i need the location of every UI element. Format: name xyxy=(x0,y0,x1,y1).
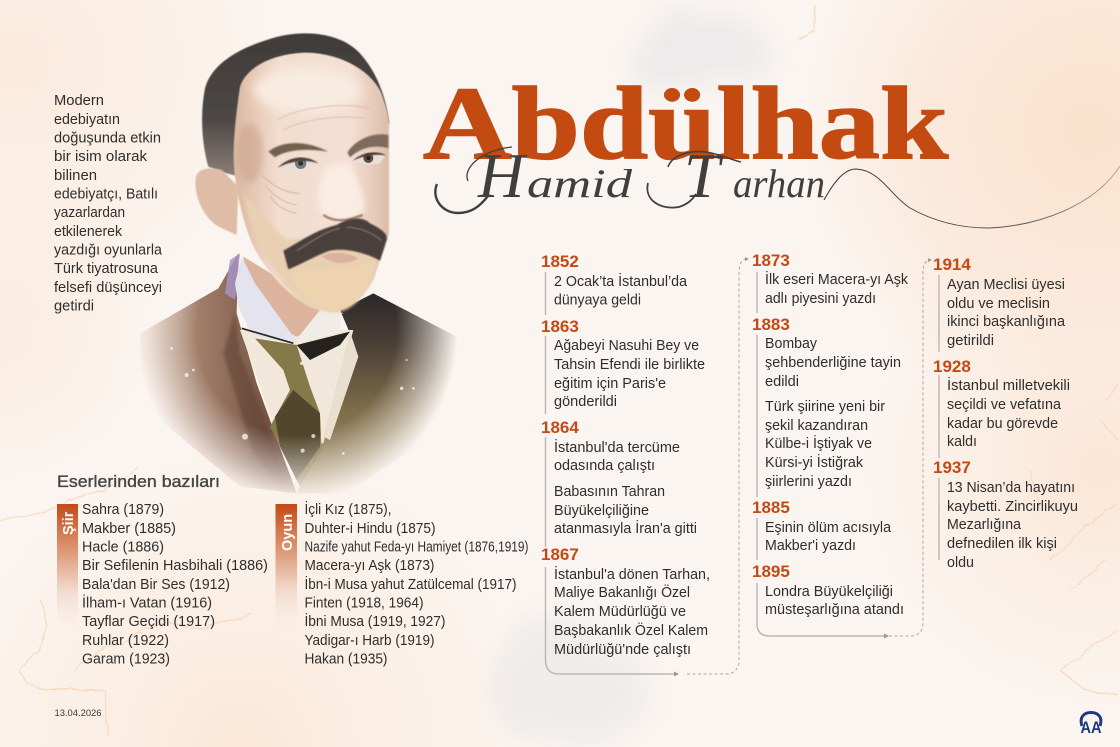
year 1883: Bombay xyxy=(765,336,818,352)
year 1873: İlk eseri Macera-yı Aşk xyxy=(765,270,909,288)
subtitle: Hamid Tarhan xyxy=(435,140,825,213)
year 1885 xyxy=(752,498,892,560)
intro paragraph xyxy=(54,93,163,314)
portrait of Abdülhak Hamid Tarhan xyxy=(140,33,457,493)
year 1883: şehbenderliğine tayin xyxy=(765,355,901,371)
year 1873 xyxy=(752,251,909,313)
year 1864: odasında çalıştı xyxy=(554,458,655,474)
subtitle: Hamid Tarhan: amid xyxy=(527,161,633,206)
year 1852: dünyaya geldi xyxy=(554,292,641,308)
intro paragraph: Türk tiyatrosuna xyxy=(54,261,159,277)
plays titles xyxy=(304,500,528,668)
icon: AA agency logo xyxy=(1080,712,1102,737)
year 1928: kadar bu görevde xyxy=(947,416,1058,432)
plays category bar: Oyun xyxy=(280,514,296,551)
year 1914: ikinci başkanlığına xyxy=(947,314,1066,330)
year 1928: seçildi ve vefatına xyxy=(947,397,1062,413)
year 1895: müsteşarlığına atandı xyxy=(765,602,904,618)
intro paragraph: etkilenerek xyxy=(54,224,123,240)
poetry titles xyxy=(82,502,268,668)
year 1864: Büyükelçiliğine xyxy=(554,503,649,519)
year 1863 xyxy=(541,317,705,414)
intro paragraph: doğuşunda etkin xyxy=(54,130,161,146)
year 1867: İstanbul'a dönen Tarhan, xyxy=(554,565,710,583)
works: plays list xyxy=(276,500,528,668)
poetry titles: Ruhlar (1922) xyxy=(82,633,169,649)
year 1863: Ağabeyi Nasuhi Bey ve xyxy=(554,338,699,354)
plays titles: Duhter-i Hindu (1875) xyxy=(304,521,436,537)
year 1883: Külbe-i İştiyak ve xyxy=(765,434,872,452)
year 1864: İstanbul'da tercüme xyxy=(554,438,680,456)
year 1883: Türk şiirine yeni bir xyxy=(765,399,885,415)
poetry titles: Tayflar Geçidi (1917) xyxy=(82,614,215,630)
poetry titles: Hacle (1886) xyxy=(82,540,164,556)
year 1873: adlı piyesini yazdı xyxy=(765,291,876,307)
works: poetry list xyxy=(57,502,268,668)
year 1937 xyxy=(933,458,1078,571)
portrait: facial details xyxy=(237,67,388,312)
year 1895: 1895 xyxy=(752,562,790,581)
year 1885: 1885 xyxy=(752,498,790,517)
poetry titles: Bala'dan Bir Ses (1912) xyxy=(82,577,230,593)
intro paragraph: bilinen xyxy=(54,168,97,184)
subtitle: Hamid Tarhan: T xyxy=(684,140,724,211)
year 1863: eğitim için Paris'e xyxy=(554,376,666,392)
year 1867 xyxy=(541,545,710,658)
year 1937: defnedilen ilk kişi xyxy=(947,536,1057,552)
poetry category bar xyxy=(57,504,78,632)
year 1885: Eşinin ölüm acısıyla xyxy=(765,520,892,536)
year 1867: 1867 xyxy=(541,545,579,564)
year 1883: Kürsi-yi İstiğrak xyxy=(765,453,864,471)
year 1895 xyxy=(752,562,904,618)
plays titles: Yadigar-ı Harb (1919) xyxy=(304,633,434,649)
works heading: Eserlerinden bazıları xyxy=(57,473,220,491)
intro paragraph: Modern xyxy=(54,93,104,109)
year 1937: oldu xyxy=(947,555,974,571)
timeline column 1 xyxy=(541,252,749,676)
year 1864: Babasının Tahran xyxy=(554,484,665,500)
date: 13.04.2026 xyxy=(54,708,102,719)
year 1937: Mezarlığına xyxy=(947,517,1022,533)
portrait: neck and collar xyxy=(235,257,343,344)
year 1864: 1864 xyxy=(541,418,579,437)
poetry category bar: Şiir xyxy=(61,511,77,535)
intro paragraph: yazarlardan xyxy=(54,205,125,221)
year 1863: 1863 xyxy=(541,317,579,336)
intro paragraph: getirdi xyxy=(54,298,94,314)
year 1883: şekil kazandıran xyxy=(765,418,868,434)
poetry titles: Bir Sefilenin Hasbihali (1886) xyxy=(82,558,268,574)
intro paragraph: yazdığı oyunlarla xyxy=(54,242,163,258)
subtitle: Hamid Tarhan: H xyxy=(477,140,528,211)
year 1867: Kalem Müdürlüğü ve xyxy=(554,604,686,620)
year 1937: 1937 xyxy=(933,458,971,477)
plays titles: Hakan (1935) xyxy=(304,652,388,668)
title: Abdülhak: Abdülhak xyxy=(423,66,949,181)
year 1852 xyxy=(541,252,688,315)
icon: AA agency logo: AA xyxy=(1080,718,1102,737)
year 1863: gönderildi xyxy=(554,394,617,410)
year 1867: Müdürlüğü'nde çalıştı xyxy=(554,642,691,658)
poetry titles: Garam (1923) xyxy=(82,652,170,668)
year 1928: kaldı xyxy=(947,434,977,450)
plays titles: Macera-yı Aşk (1873) xyxy=(304,558,434,574)
year 1883: 1883 xyxy=(752,315,790,334)
year 1937: 13 Nisan’da hayatını xyxy=(947,480,1075,496)
timeline column 3 xyxy=(933,255,1078,571)
subtitle: Hamid Tarhan: arhan xyxy=(733,161,825,206)
intro paragraph: bir isim olarak xyxy=(54,149,148,165)
year 1883 xyxy=(752,315,901,497)
connector arrow to column 3 xyxy=(757,258,932,638)
year 1928: 1928 xyxy=(933,357,971,376)
year 1914: getirildi xyxy=(947,333,994,349)
year 1852: 1852 xyxy=(541,252,579,271)
year 1867: Başbakanlık Özel Kalem xyxy=(554,621,708,639)
year 1852: 2 Ocak’ta İstanbul’da xyxy=(554,272,688,290)
year 1867: Maliye Bakanlığı Özel xyxy=(554,583,690,601)
portrait: hair xyxy=(202,33,389,177)
intro paragraph: felsefi düşünceyi xyxy=(54,280,162,296)
year 1864: atanmasıyla İran'a gitti xyxy=(554,519,697,537)
year 1883: şiirlerini yazdı xyxy=(765,474,852,490)
poetry titles: İlham-ı Vatan (1916) xyxy=(82,594,212,612)
portrait: suit and shirt xyxy=(140,253,457,493)
year 1885: Makber'i yazdı xyxy=(765,538,856,554)
year 1928 xyxy=(933,357,1070,458)
year 1914: oldu ve meclisin xyxy=(947,296,1050,312)
plays titles: İçli Kız (1875), xyxy=(304,500,392,518)
year 1914: 1914 xyxy=(933,255,971,274)
plays titles: İbn-i Musa yahut Zatülcemal (1917) xyxy=(304,575,516,593)
decorative title curve xyxy=(824,166,1120,228)
plays titles: Finten (1918, 1964) xyxy=(304,596,424,612)
portrait: ear xyxy=(195,168,238,235)
year 1883: edildi xyxy=(765,374,799,390)
poetry titles: Makber (1885) xyxy=(82,521,176,537)
plays titles: İbni Musa (1919, 1927) xyxy=(304,612,446,630)
year 1863: Tahsin Efendi ile birlikte xyxy=(554,357,705,373)
portrait: face xyxy=(234,53,389,312)
year 1914 xyxy=(933,255,1066,352)
poetry titles: Sahra (1879) xyxy=(82,502,164,518)
year 1914: Ayan Meclisi üyesi xyxy=(947,277,1065,293)
portrait: paint speckles xyxy=(170,347,415,455)
connector arrow to column 2 xyxy=(546,257,749,676)
plays titles: Nazife yahut Feda-yı Hamiyet (1876,1919) xyxy=(304,540,528,556)
intro paragraph: edebiyatçı, Batılı xyxy=(54,186,158,202)
year 1895: Londra Büyükelçiliği xyxy=(765,584,893,600)
plays category bar xyxy=(276,504,297,632)
year 1937: kaybetti. Zincirlikuyu xyxy=(947,499,1078,515)
intro paragraph: edebiyatın xyxy=(54,112,120,128)
year 1928: İstanbul milletvekili xyxy=(947,376,1070,394)
year 1864 xyxy=(541,418,697,547)
year 1873: 1873 xyxy=(752,251,790,270)
timeline column 2 xyxy=(752,251,932,638)
